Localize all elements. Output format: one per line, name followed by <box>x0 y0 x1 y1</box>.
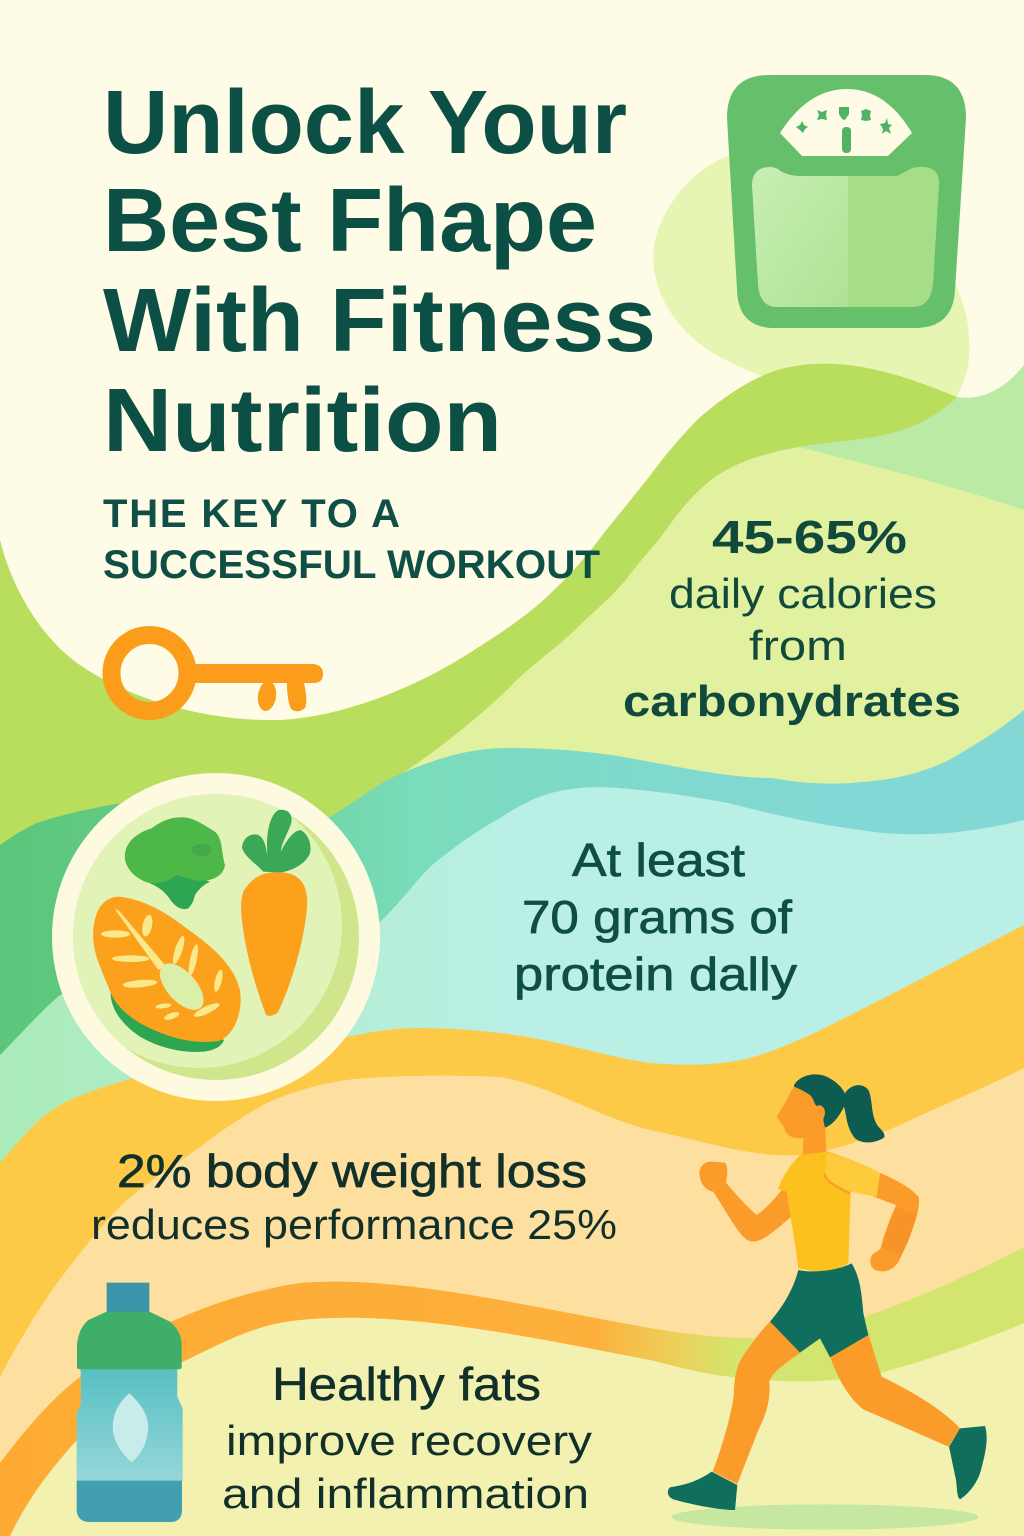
hair and ponytail <box>794 1074 884 1142</box>
stat: body weight loss <box>91 1145 617 1248</box>
stat: carbohydrates: daily calories <box>669 570 937 617</box>
icon: bathroom scale <box>727 75 966 328</box>
stat: healthy fats: Healthy fats <box>272 1358 541 1410</box>
title: Best Fhape <box>103 171 597 271</box>
title <box>103 73 656 471</box>
stat: protein <box>514 834 797 1000</box>
left arm <box>699 1162 792 1242</box>
front leg <box>713 1322 800 1484</box>
back leg <box>822 1333 960 1447</box>
stat: healthy fats <box>222 1358 592 1517</box>
shirt <box>778 1152 880 1272</box>
salmon steak <box>93 897 241 1052</box>
shorts <box>770 1263 868 1357</box>
broccoli <box>125 817 225 909</box>
stat: carbohydrates: carbonydrates <box>623 677 961 726</box>
stat: healthy fats: and inflammation <box>222 1470 589 1517</box>
right arm <box>870 1172 919 1271</box>
stat: protein: protein dally <box>514 948 797 1000</box>
icon: female runner <box>668 1074 987 1530</box>
stat: carbohydrates: 45-65% <box>712 511 907 563</box>
stat: healthy fats: improve recovery <box>226 1417 592 1464</box>
icon: golden key <box>112 635 323 712</box>
stat: carbohydrates: from <box>749 622 847 669</box>
icon: plate of food <box>52 773 380 1101</box>
subtitle: THE KEY TO A <box>103 492 400 536</box>
stat: protein: At least <box>572 834 745 886</box>
stat: protein: 70 grams of <box>522 891 792 943</box>
stat: carbohydrates <box>623 511 961 726</box>
stat: body weight loss: 2% body weight loss <box>117 1145 587 1197</box>
icon: water bottle <box>77 1283 183 1522</box>
shoes <box>668 1426 987 1510</box>
ear <box>814 1105 825 1120</box>
carrot <box>241 810 310 1016</box>
stat: body weight loss: reduces performance 25% <box>91 1201 617 1248</box>
title: Unlock Your <box>103 73 627 173</box>
subtitle <box>103 492 600 587</box>
subtitle: SUCCESSFUL WORKOUT <box>103 543 600 587</box>
neck and face <box>777 1087 830 1155</box>
title: With Fitness <box>103 271 656 371</box>
title: Nutrition <box>103 371 502 471</box>
